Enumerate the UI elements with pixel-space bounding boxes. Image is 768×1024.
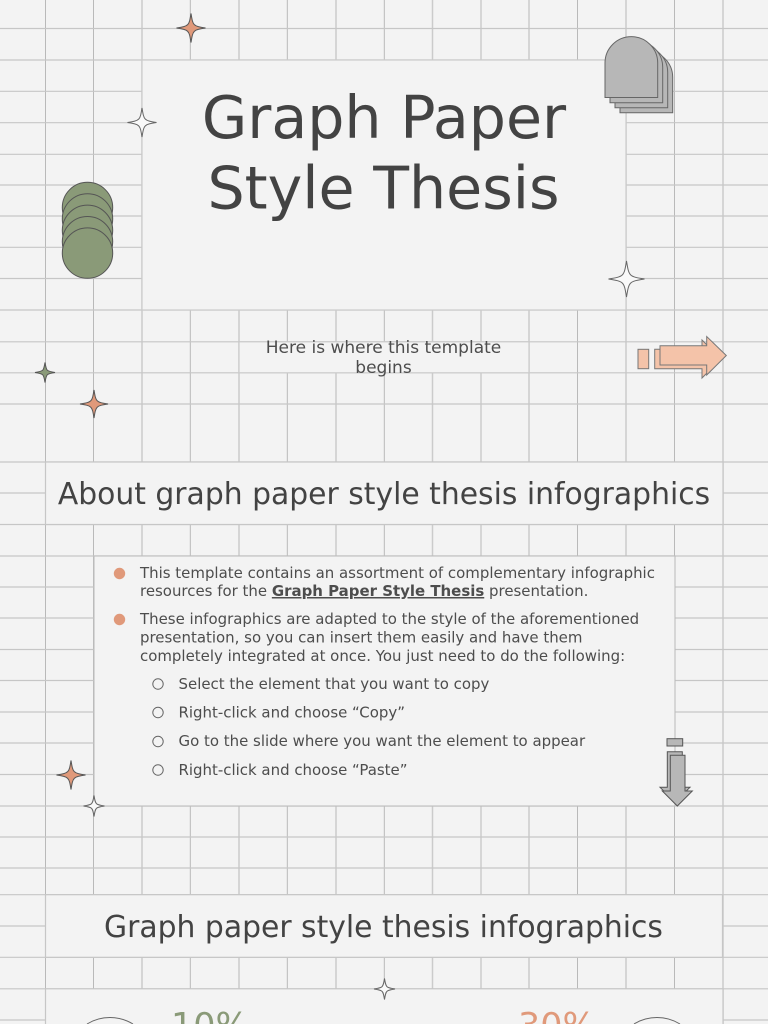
step 1: Select the element that you want to copy bbox=[178, 675, 490, 693]
heading: about: About graph paper style thesis infographics bbox=[58, 477, 710, 512]
circle left bbox=[87, 1018, 133, 1024]
icon: stacked circles bbox=[62, 182, 113, 278]
step 2: Right-click and choose “Copy” bbox=[178, 704, 405, 722]
icon: white star right bbox=[608, 261, 644, 297]
panel: subtitle bbox=[239, 338, 529, 378]
icon: orange star lower bbox=[56, 760, 86, 790]
bullet 1: resources for the Graph Paper Style Thesis presentation. bbox=[140, 582, 588, 600]
icon: white star bottom bbox=[374, 978, 395, 1000]
subtitle text: Here is where this template bbox=[266, 338, 501, 358]
title: Style Thesis bbox=[207, 154, 560, 222]
panel: about heading bbox=[46, 462, 723, 524]
icon: down arrow bbox=[660, 739, 692, 806]
bullet 1 bbox=[114, 564, 655, 600]
icon: orange star top bbox=[176, 14, 206, 42]
bullet 2 bbox=[114, 610, 639, 665]
icon: right arrow bbox=[638, 336, 726, 378]
icon: orange star middle bbox=[80, 390, 108, 418]
panel: infographics heading bbox=[46, 895, 722, 957]
heading: infographics: Graph paper style thesis infographics bbox=[104, 910, 663, 945]
step 3: Go to the slide where you want the element to appear bbox=[178, 732, 586, 750]
bullet 2: completely integrated at once. You just need to do the following: bbox=[140, 647, 625, 665]
panel: instructions bbox=[94, 556, 675, 806]
title: Graph Paper bbox=[202, 84, 567, 152]
bullet 2: presentation, so you can insert them easily and have them bbox=[140, 628, 582, 646]
panel: percentages bbox=[46, 989, 723, 1024]
subtitle text: begins bbox=[355, 358, 412, 378]
bullet 2: These infographics are adapted to the style of the aforementioned bbox=[139, 610, 639, 628]
icon: green star bbox=[35, 362, 55, 382]
icon: stacked arches bbox=[605, 37, 673, 113]
panel: title bbox=[142, 60, 626, 310]
circle right bbox=[634, 1018, 680, 1024]
icon: white star lower bbox=[84, 796, 104, 816]
step 4: Right-click and choose “Paste” bbox=[178, 761, 407, 779]
icon: white star left bbox=[128, 108, 156, 137]
bullet 1: This template contains an assortment of complementary infographic bbox=[139, 564, 655, 582]
